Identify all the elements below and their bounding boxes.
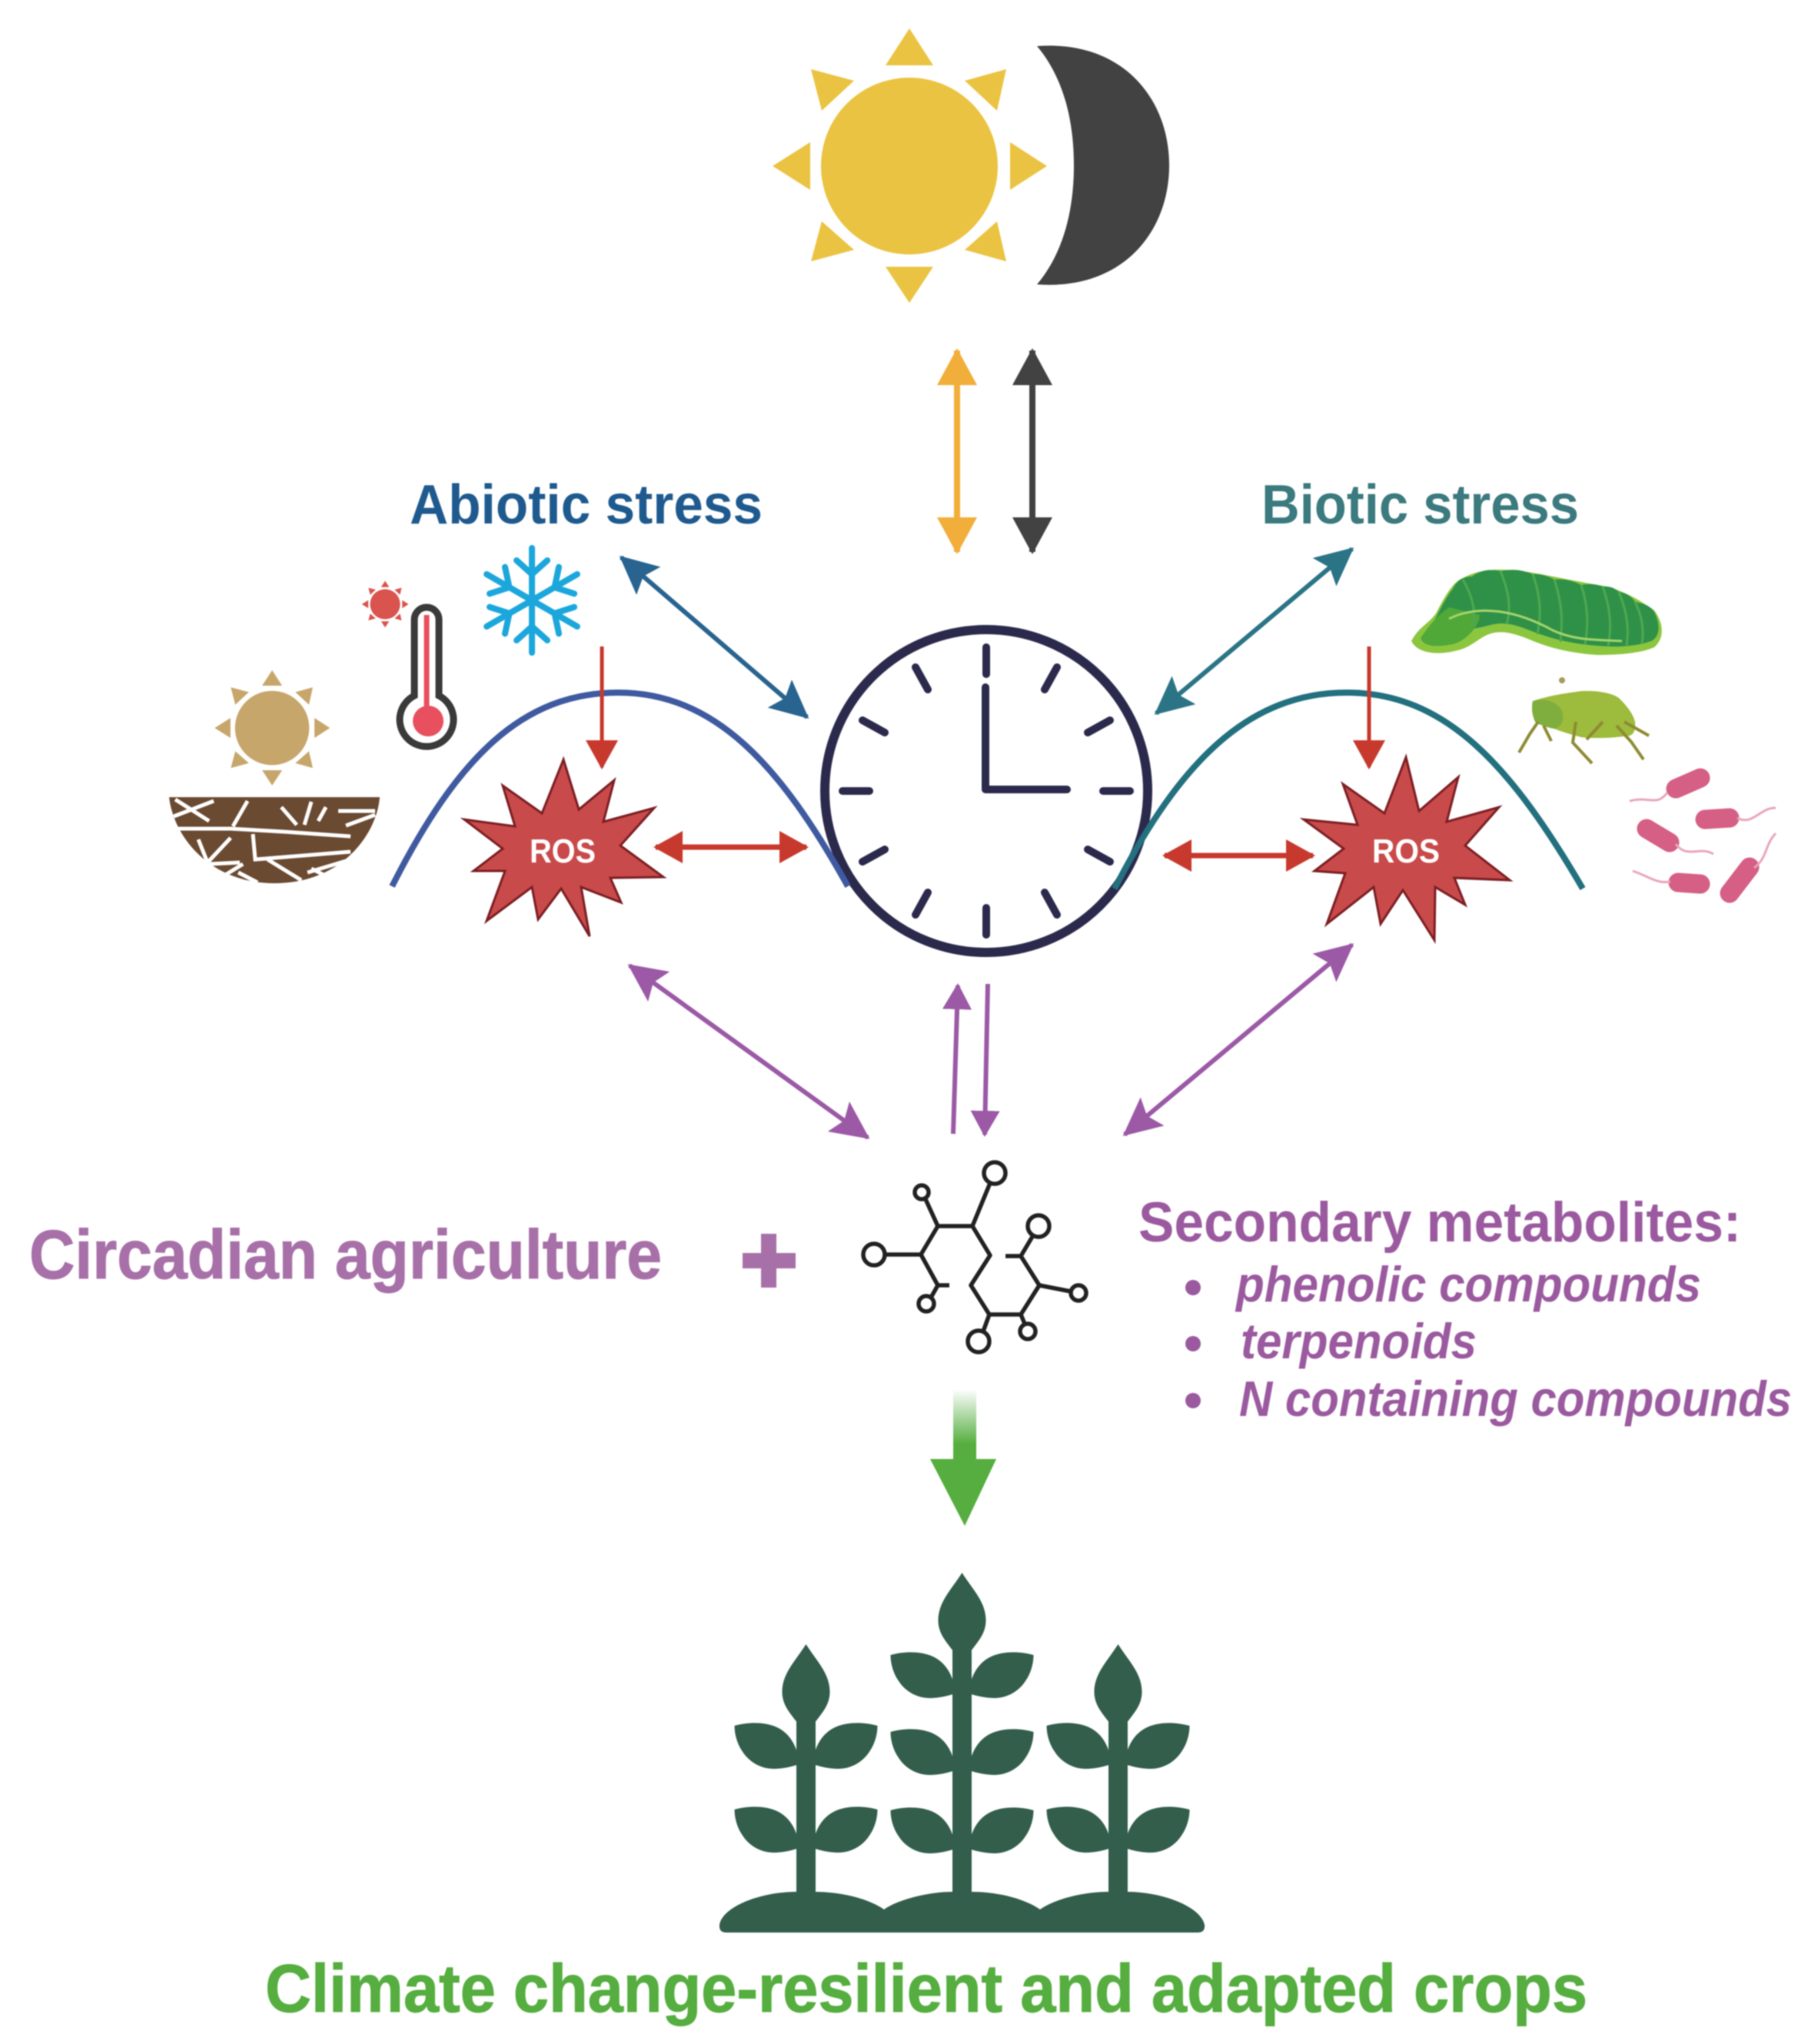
icon: bacteria [1630, 778, 1776, 893]
burst: ROS left [464, 759, 663, 936]
icon: cracked soil [169, 797, 380, 883]
arrow: green down [930, 1389, 996, 1526]
red arrow: biotic stress to ROS [1367, 646, 1371, 767]
text block: secondary metabolites: phenolic compounds [1235, 1256, 1701, 1312]
burst: ROS right [1304, 757, 1510, 940]
heading: secondary metabolites: Secondary metabolites: [1138, 1192, 1741, 1254]
purple arrow: left ROS to metabolites [630, 965, 868, 1138]
burst: ROS right: ROS [1372, 833, 1440, 870]
icon: clock [825, 630, 1148, 952]
curve: biotic rhythm [1115, 693, 1583, 889]
title: climate change-resilient and adapted crops: Climate change-resilient and adapted crops [265, 1950, 1587, 2026]
arrow: sun to clock [954, 351, 960, 552]
icon: moon [1037, 45, 1169, 285]
icon: caterpillar [1411, 570, 1662, 655]
arrow: abiotic stress to clock [621, 557, 807, 717]
icon: crops [720, 1573, 1205, 1933]
heading: abiotic stress: Abiotic stress [410, 474, 763, 536]
text block: secondary metabolites: terpenoids [1241, 1313, 1477, 1369]
purple arrow: right ROS to metabolites [1125, 945, 1352, 1135]
purple arrow: metabolites to clock [953, 985, 958, 1134]
icon: thermometer [400, 607, 454, 746]
arrow: biotic stress to clock [1156, 549, 1352, 713]
text block: secondary metabolites [1138, 1192, 1792, 1427]
arrow: moon to clock [1029, 351, 1035, 552]
icon: sun [773, 28, 1047, 303]
heading: biotic stress: Biotic stress [1261, 474, 1579, 536]
icon: molecule [863, 1162, 1086, 1352]
purple arrow: clock to metabolites [985, 984, 988, 1135]
label: circadian agriculture: Circadian agriculture [29, 1217, 662, 1294]
icon: small sun [214, 670, 330, 786]
red arrow: clock to ROS right [1165, 853, 1313, 858]
icon: aphid [1519, 677, 1649, 763]
red arrow: ROS to clock left [656, 844, 806, 850]
curve: abiotic rhythm [392, 693, 848, 886]
icon: small red sun [362, 581, 408, 627]
icon: plus [743, 1234, 796, 1288]
burst: ROS left: ROS [530, 833, 596, 870]
icon: snowflake [479, 548, 585, 653]
red arrow: abiotic stress to ROS [600, 646, 604, 767]
